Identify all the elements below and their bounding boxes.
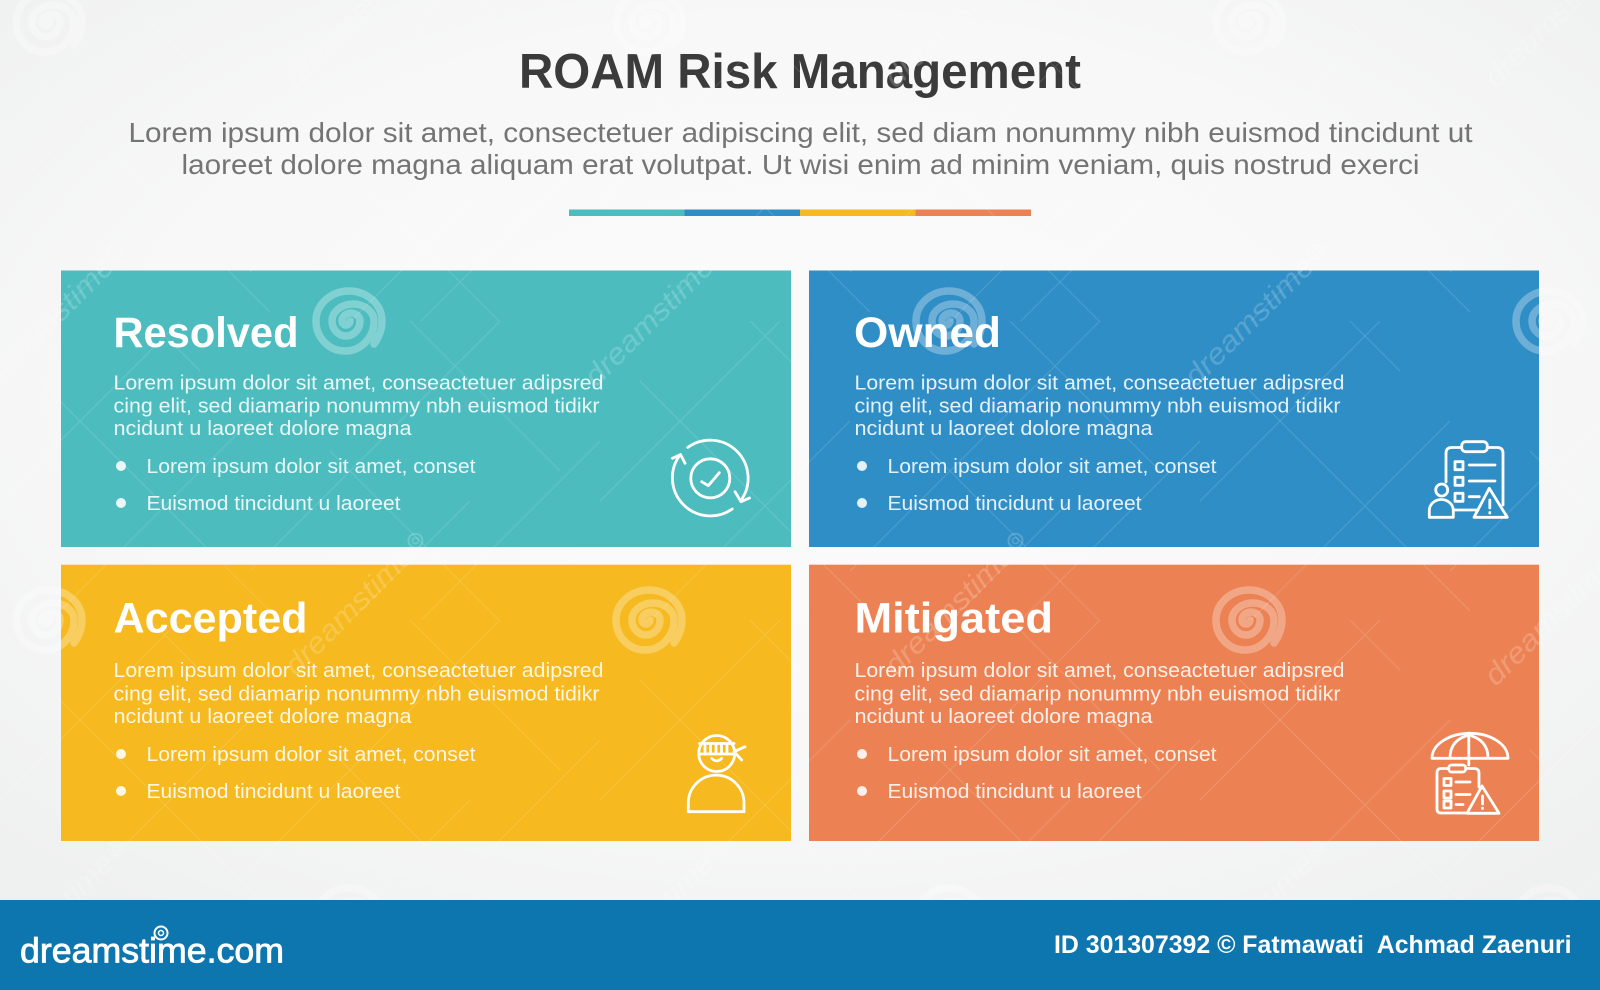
bullet list: mitigated: Euismod tincidunt u laoreet xyxy=(888,781,1142,803)
bullet list: mitigated xyxy=(857,744,1217,803)
bullet list: owned: Euismod tincidunt u laoreet xyxy=(888,493,1142,515)
bullet list: resolved: Lorem ipsum dolor sit amet, conset xyxy=(146,456,476,478)
heading: resolved: Resolved xyxy=(114,309,298,357)
icon: checklist with person and warning xyxy=(1429,442,1507,517)
body text: mitigated: cing elit, sed diamarip nonummy nbh euismod tidikr xyxy=(854,684,1341,706)
footer credit: ID 301307392 © Fatmawati Achmad Zaenuri xyxy=(1054,931,1572,959)
bullet list: resolved: Euismod tincidunt u laoreet xyxy=(146,493,401,515)
body text: owned: ncidunt u laoreet dolore magna xyxy=(854,418,1153,440)
body text: accepted xyxy=(114,660,604,728)
panel: resolved xyxy=(61,270,791,547)
body text: accepted: Lorem ipsum dolor sit amet, conseactetuer adipsred xyxy=(114,660,604,682)
body text: accepted: cing elit, sed diamarip nonummy nbh euismod tidikr xyxy=(114,684,600,706)
heading: accepted: Accepted xyxy=(114,595,308,643)
title: ROAM Risk Management xyxy=(519,45,1081,99)
body text: owned xyxy=(854,372,1344,440)
bullet list: owned: Lorem ipsum dolor sit amet, conset xyxy=(888,456,1217,478)
bullet list: resolved xyxy=(116,456,476,515)
body text: mitigated xyxy=(854,660,1344,728)
body text: owned: cing elit, sed diamarip nonummy nbh euismod tidikr xyxy=(854,396,1341,418)
watermark overlay xyxy=(61,54,1539,841)
body text: resolved: Lorem ipsum dolor sit amet, conseactetuer adipsred xyxy=(114,372,604,394)
body text: resolved xyxy=(114,372,604,440)
heading: owned: Owned xyxy=(854,309,1001,357)
subtitle text block xyxy=(128,117,1473,180)
icon: person with bandana xyxy=(688,736,745,812)
panel: owned xyxy=(809,270,1539,547)
subtitle text block: Lorem ipsum dolor sit amet, consectetuer adipiscing elit, sed diam nonummy nibh euismod tincidunt ut xyxy=(128,117,1473,148)
four colour divider xyxy=(569,210,1031,216)
bullet list: accepted: Euismod tincidunt u laoreet xyxy=(146,781,401,803)
bullet list: owned xyxy=(857,456,1217,515)
panel: mitigated xyxy=(809,565,1539,841)
body text: resolved: ncidunt u laoreet dolore magna xyxy=(114,418,412,440)
body text: mitigated: ncidunt u laoreet dolore magna xyxy=(854,706,1153,728)
bullet list: accepted xyxy=(116,744,476,803)
footer logo: dreamstime.com xyxy=(20,932,284,970)
body text: accepted: ncidunt u laoreet dolore magna xyxy=(114,706,412,728)
bullet list: accepted: Lorem ipsum dolor sit amet, conset xyxy=(146,744,476,766)
bullet list: mitigated: Lorem ipsum dolor sit amet, conset xyxy=(888,744,1217,766)
subtitle text block: laoreet dolore magna aliquam erat volutpat. Ut wisi enim ad minim veniam, quis nostrud exerci xyxy=(182,149,1420,180)
body text: owned: Lorem ipsum dolor sit amet, conseactetuer adipsred xyxy=(854,372,1344,394)
icon: circular arrows with check xyxy=(672,440,750,516)
body text: resolved: cing elit, sed diamarip nonummy nbh euismod tidikr xyxy=(114,396,600,418)
body text: mitigated: Lorem ipsum dolor sit amet, conseactetuer adipsred xyxy=(854,660,1344,682)
heading: mitigated: Mitigated xyxy=(854,595,1053,643)
footer bar xyxy=(0,900,1600,990)
panel: accepted xyxy=(61,565,791,841)
icon: umbrella over checklist with warning xyxy=(1432,733,1508,813)
